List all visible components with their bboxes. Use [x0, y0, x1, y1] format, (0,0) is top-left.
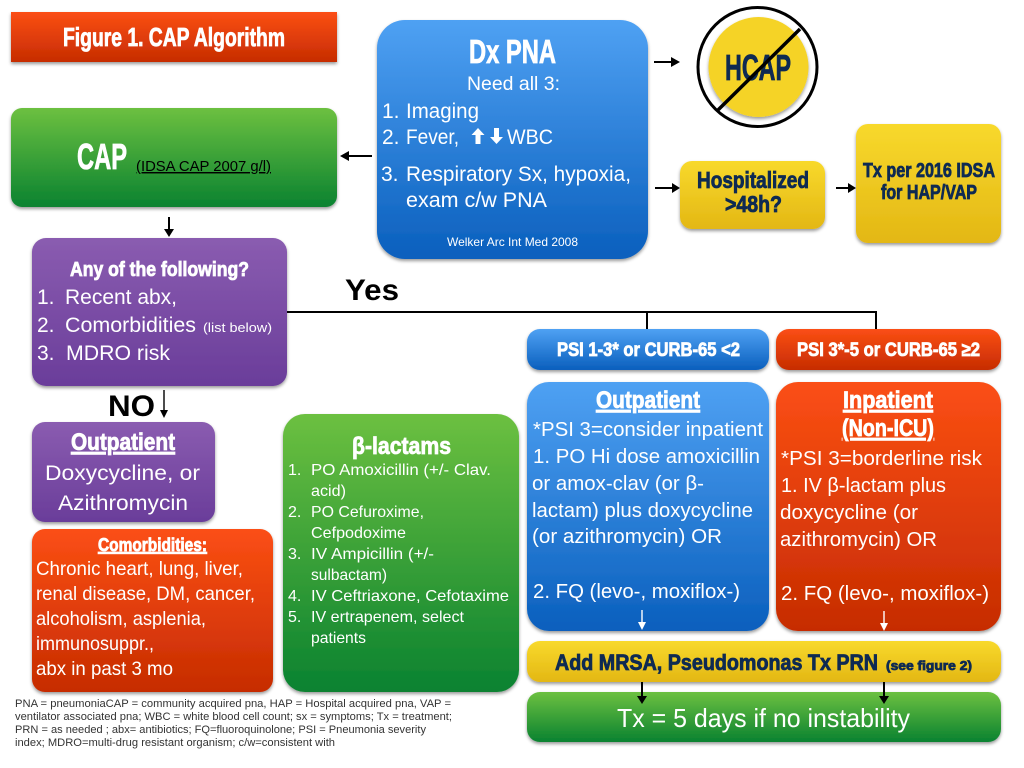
panel: Dx PNA: exam c/w PNA	[406, 189, 547, 212]
arrow: CAP to criteria	[164, 217, 174, 237]
panel: Add MRSA: Add MRSA, Pseudomonas Tx PRN	[555, 650, 878, 675]
panel: Comorbidities: renal disease, DM, cancer,	[36, 583, 255, 605]
icon: HCAP crossed out	[698, 8, 817, 126]
panel: Dx PNA	[377, 20, 648, 259]
panel: Outpatient treatment: or amox-clav (or β-	[532, 473, 704, 495]
arrow: Dx PNA to HCAP	[654, 57, 680, 67]
panel: Any of the following: Comorbidities	[65, 314, 196, 337]
panel: Dx PNA: Imaging	[406, 100, 479, 123]
footnote: abbreviations: index; MDRO=multi-drug resistant organism; c/w=consistent with	[15, 737, 335, 749]
panel: beta-lactams: PO Cefuroxime,	[311, 504, 424, 521]
panel: Outpatient no risk: Azithromycin	[58, 492, 188, 515]
panel: Inpatient treatment: 2. FQ (levo-, moxiflox-)	[781, 583, 989, 605]
panel: Any of the following: (list below)	[203, 320, 272, 335]
panel: Comorbidities: Comorbidities:	[98, 535, 207, 555]
panel: Outpatient no risk: Outpatient	[71, 429, 175, 456]
panel: Inpatient treatment: (Non-ICU)	[842, 415, 934, 442]
panel: Dx PNA: Respiratory Sx, hypoxia,	[406, 163, 631, 186]
panel: Any of the following: Recent abx,	[65, 286, 177, 309]
title	[11, 12, 337, 62]
panel: beta-lactams: sulbactam)	[311, 567, 387, 584]
panel: Any of the following	[32, 238, 287, 386]
panel: PSI high: PSI 3*-5 or CURB-65 ≥2	[797, 340, 980, 361]
panel: Dx PNA: Welker Arc Int Med 2008	[447, 235, 578, 249]
panel: PSI low: PSI 1-3* or CURB-65 <2	[557, 340, 740, 361]
panel: Outpatient treatment: 1. PO Hi dose amoxicillin	[533, 446, 760, 468]
panel: beta-lactams: patients	[311, 630, 366, 647]
panel: beta-lactams: IV Ampicillin (+/-	[311, 546, 434, 563]
panel: Hospitalized: >48h?	[725, 191, 782, 217]
panel: Outpatient treatment: 2. FQ (levo-, moxiflox-)	[533, 581, 740, 603]
panel: beta-lactams: 1.	[288, 462, 301, 479]
panel: Dx PNA: 3.	[381, 163, 399, 186]
panel: beta-lactams: acid)	[311, 483, 346, 500]
footnote: abbreviations	[15, 698, 452, 749]
panel: Dx PNA: Fever,	[406, 126, 459, 149]
arrow: Dx PNA to Hospitalized	[655, 183, 680, 193]
panel: Hospitalized: Hospitalized	[697, 167, 809, 193]
panel: PSI low	[527, 329, 769, 370]
panel: Outpatient no risk	[32, 422, 215, 522]
label: NO: NO	[108, 390, 155, 423]
connector: Yes branch	[287, 312, 876, 329]
panel: Inpatient treatment: 1. IV β-lactam plus	[781, 475, 946, 497]
panel: Any of the following: Any of the following?	[70, 259, 249, 281]
panel: Comorbidities: immunosuppr.,	[36, 633, 154, 655]
panel: Outpatient treatment: Outpatient	[596, 387, 700, 414]
panel: beta-lactams: 2.	[288, 504, 301, 521]
panel: Any of the following: 2.	[37, 314, 55, 337]
arrow: Dx PNA to CAP	[340, 151, 372, 161]
footnote: abbreviations: PRN = as needed ; abx= antibiotics; FQ=fluoroquinolone; PSI = Pneumonia severity	[15, 724, 426, 736]
title: Figure 1. CAP Algorithm	[63, 22, 285, 52]
panel: Tx duration: Tx = 5 days if no instability	[617, 703, 910, 733]
panel: Comorbidities: Chronic heart, lung, liver,	[36, 558, 243, 580]
panel: Outpatient treatment: *PSI 3=consider inpatient	[533, 419, 763, 441]
panel: Outpatient no risk: Doxycycline, or	[45, 462, 200, 485]
panel: beta-lactams: β-lactams	[352, 433, 451, 460]
panel: Add MRSA	[527, 641, 1001, 682]
panel: beta-lactams: IV ertrapenem, select	[311, 609, 465, 626]
arrow: Hospitalized to Tx	[836, 183, 856, 193]
panel: Inpatient treatment: *PSI 3=borderline risk	[781, 448, 983, 470]
panel: Add MRSA: (see figure 2)	[886, 658, 972, 673]
panel: Inpatient treatment	[776, 382, 1001, 631]
panel: Inpatient treatment: Inpatient	[843, 387, 933, 414]
panel: Any of the following: 1.	[37, 286, 55, 309]
panel: Any of the following: MDRO risk	[66, 342, 171, 365]
panel: CAP: (IDSA CAP 2007 g/l)	[136, 159, 271, 175]
panel: Hospitalized	[680, 161, 825, 229]
panel: beta-lactams: 3.	[288, 546, 301, 563]
panel: Any of the following: 3.	[37, 342, 55, 365]
arrow: NO	[160, 390, 168, 418]
panel: Comorbidities: abx in past 3 mo	[36, 658, 173, 680]
panel: beta-lactams: IV Ceftriaxone, Cefotaxime	[311, 588, 509, 605]
panel: Tx per IDSA: Tx per 2016 IDSA	[863, 160, 995, 182]
panel: beta-lactams: Cefpodoxime	[311, 525, 406, 542]
arrow: MRSA to duration right	[879, 682, 889, 704]
panel: Dx PNA: WBC	[507, 126, 553, 149]
panel: Dx PNA: 1.	[382, 100, 400, 123]
panel: beta-lactams	[283, 414, 519, 692]
panel: CAP: CAP	[77, 136, 127, 177]
panel: Dx PNA: Dx PNA	[469, 33, 556, 70]
panel: CAP	[11, 108, 337, 207]
panel: Dx PNA: 2.	[382, 126, 400, 149]
panel: Outpatient treatment: lactam) plus doxycycline	[532, 500, 753, 522]
panel: Inpatient treatment: doxycycline (or	[780, 502, 918, 524]
panel: Inpatient treatment: azithromycin) OR	[780, 529, 937, 551]
panel: Comorbidities: alcoholism, asplenia,	[36, 608, 206, 630]
footnote: abbreviations: ventilator associated pna; WBC = white blood cell count; sx = symptoms; Tx = treatment;	[15, 711, 452, 723]
panel: Tx per IDSA	[856, 124, 1001, 243]
panel: Outpatient treatment	[527, 382, 769, 631]
panel: Dx PNA: Need all 3:	[467, 74, 560, 95]
panel: PSI high	[776, 329, 1001, 370]
panel: Comorbidities	[32, 529, 273, 692]
footnote: abbreviations: PNA = pneumoniaCAP = community acquired pna, HAP = Hospital acquired pna, VAP =	[15, 698, 451, 710]
panel: beta-lactams: 4.	[288, 588, 301, 605]
panel: beta-lactams: PO Amoxicillin (+/- Clav.	[311, 462, 491, 479]
panel: Tx per IDSA: for HAP/VAP	[881, 182, 977, 204]
panel: Outpatient treatment: (or azithromycin) OR	[532, 526, 722, 548]
panel: Tx duration	[527, 692, 1001, 742]
panel: beta-lactams: 5.	[288, 609, 301, 626]
label: Yes: Yes	[345, 274, 399, 307]
arrow: MRSA to duration left	[637, 682, 647, 704]
icon: HCAP crossed out: HCAP	[725, 47, 791, 88]
